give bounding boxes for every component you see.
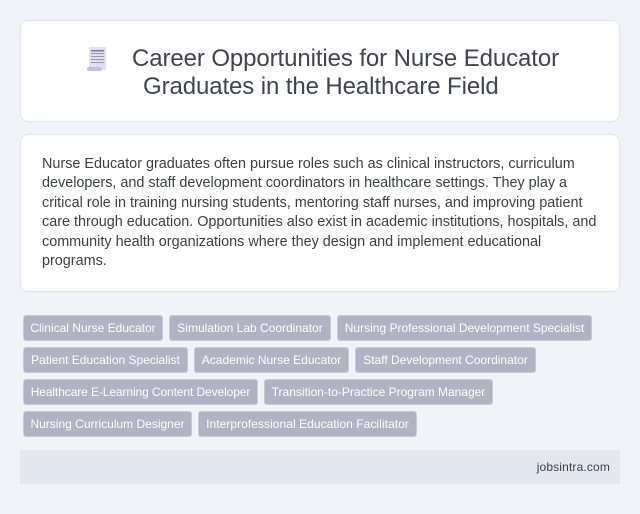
- tag: Transition-to-Practice Program Manager: [264, 379, 493, 405]
- text block: description: community health organizations where they design and implement educational: [42, 234, 541, 250]
- panel: title card: [20, 20, 620, 122]
- text block: description: programs.: [42, 253, 107, 269]
- tag: Patient Education Specialist: [23, 347, 188, 373]
- footer bar: [20, 450, 620, 484]
- title: Graduates in the Healthcare Field: [143, 73, 499, 100]
- icon: paper scroll: [87, 47, 106, 71]
- text block: description: developers, and staff development coordinators in healthcare settings. They play a: [42, 175, 567, 191]
- tag: Transition-to-Practice Program Manager: Transition-to-Practice Program Manager: [272, 385, 485, 399]
- footer source text: jobsintra.com: [537, 460, 610, 474]
- text block: description: care through education. Opportunities also exist in academic institutions, hospitals, and: [42, 214, 596, 230]
- panel: description card: [20, 134, 620, 292]
- tag: Academic Nurse Educator: [194, 347, 349, 373]
- tag: Clinical Nurse Educator: [23, 315, 163, 341]
- tag: Simulation Lab Coordinator: [169, 315, 331, 341]
- tag: Interprofessional Education Facilitator: Interprofessional Education Facilitator: [206, 417, 409, 431]
- tag: Interprofessional Education Facilitator: [198, 411, 417, 437]
- tag: Healthcare E-Learning Content Developer: Healthcare E-Learning Content Developer: [31, 385, 250, 399]
- title: [132, 45, 559, 100]
- tag: Staff Development Coordinator: Staff Development Coordinator: [363, 353, 528, 367]
- tag: Nursing Curriculum Designer: [23, 411, 192, 437]
- tag: Staff Development Coordinator: [355, 347, 536, 373]
- tag: Academic Nurse Educator: Academic Nurse Educator: [202, 353, 341, 367]
- text block: description: critical role in training nursing students, mentoring staff nurses, and improving patient: [42, 195, 582, 211]
- tag: Simulation Lab Coordinator: Simulation Lab Coordinator: [177, 321, 323, 335]
- title: Career Opportunities for Nurse Educator: [132, 45, 559, 72]
- tag: Clinical Nurse Educator: Clinical Nurse Educator: [30, 321, 156, 335]
- text block: description: Nurse Educator graduates often pursue roles such as clinical instructors, curriculum: [42, 156, 575, 172]
- tag: Nursing Professional Development Specialist: Nursing Professional Development Specialist: [345, 321, 584, 335]
- career tags: [23, 315, 592, 437]
- tag: Nursing Curriculum Designer: Nursing Curriculum Designer: [30, 417, 185, 431]
- tag: Patient Education Specialist: Patient Education Specialist: [31, 353, 180, 367]
- tag: Healthcare E-Learning Content Developer: [23, 379, 258, 405]
- tag: Nursing Professional Development Specialist: [337, 315, 592, 341]
- text block: description: [42, 156, 596, 269]
